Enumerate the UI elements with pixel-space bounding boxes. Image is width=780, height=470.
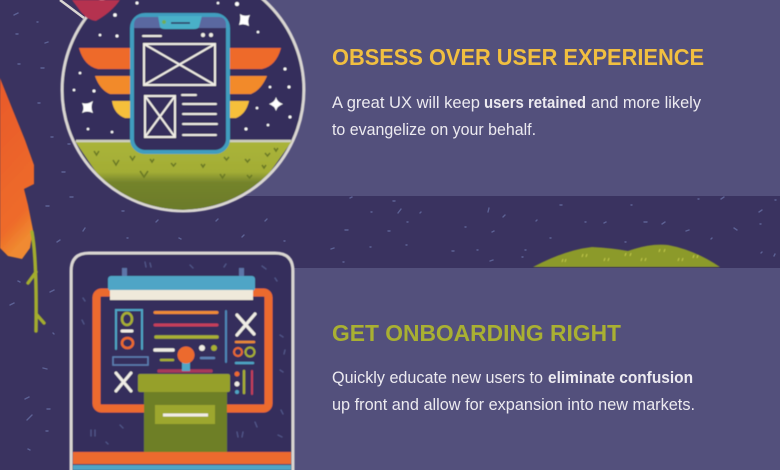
text: onboarding description: up front and allow for expansion into new markets. — [332, 396, 695, 414]
panel: onboarding background — [294, 268, 780, 470]
grass tufts — [94, 148, 278, 178]
text: onboarding description: Quickly educate new users to — [332, 369, 543, 387]
wings: right — [228, 48, 281, 118]
white banner — [110, 290, 253, 300]
text: experience description: and more likely — [591, 94, 702, 112]
pegs — [122, 268, 244, 277]
text: onboarding description: eliminate confusion — [548, 369, 693, 387]
orange button — [178, 346, 194, 371]
wings: left — [79, 48, 131, 118]
text: experience description: to evangelize on your behalf. — [332, 121, 536, 139]
text: experience description: A great UX will keep — [332, 94, 480, 112]
green hill — [533, 245, 720, 267]
podium — [138, 374, 230, 453]
board dots — [199, 345, 205, 351]
blue roller — [108, 276, 255, 291]
board content right — [234, 314, 255, 394]
grass — [75, 141, 292, 210]
board content lines — [155, 311, 226, 371]
text: experience description — [332, 94, 702, 139]
illustration: circular phone badge — [62, 0, 304, 211]
illustration: orange leaf — [0, 78, 44, 331]
chalk tail — [60, 0, 84, 18]
board content left — [113, 310, 148, 391]
orange board — [96, 292, 268, 408]
heading: get onboarding right: GET ONBOARDING RIGHT — [332, 320, 621, 346]
text: onboarding description — [332, 369, 695, 414]
floor stripes — [73, 452, 291, 470]
panel: experience background — [183, 0, 780, 196]
illustration: onboarding classroom frame — [71, 253, 293, 470]
text: experience description: users retained — [484, 94, 586, 112]
badge circle — [62, 0, 304, 211]
leaf stem — [28, 232, 44, 331]
chalk frame — [71, 253, 293, 470]
heading: obsess over user experience: OBSESS OVER USER EXPERIENCE — [332, 44, 704, 70]
icon: red shape at top — [72, 0, 120, 21]
icon: phone wireframe — [132, 15, 228, 152]
stars in badge — [73, 2, 292, 133]
